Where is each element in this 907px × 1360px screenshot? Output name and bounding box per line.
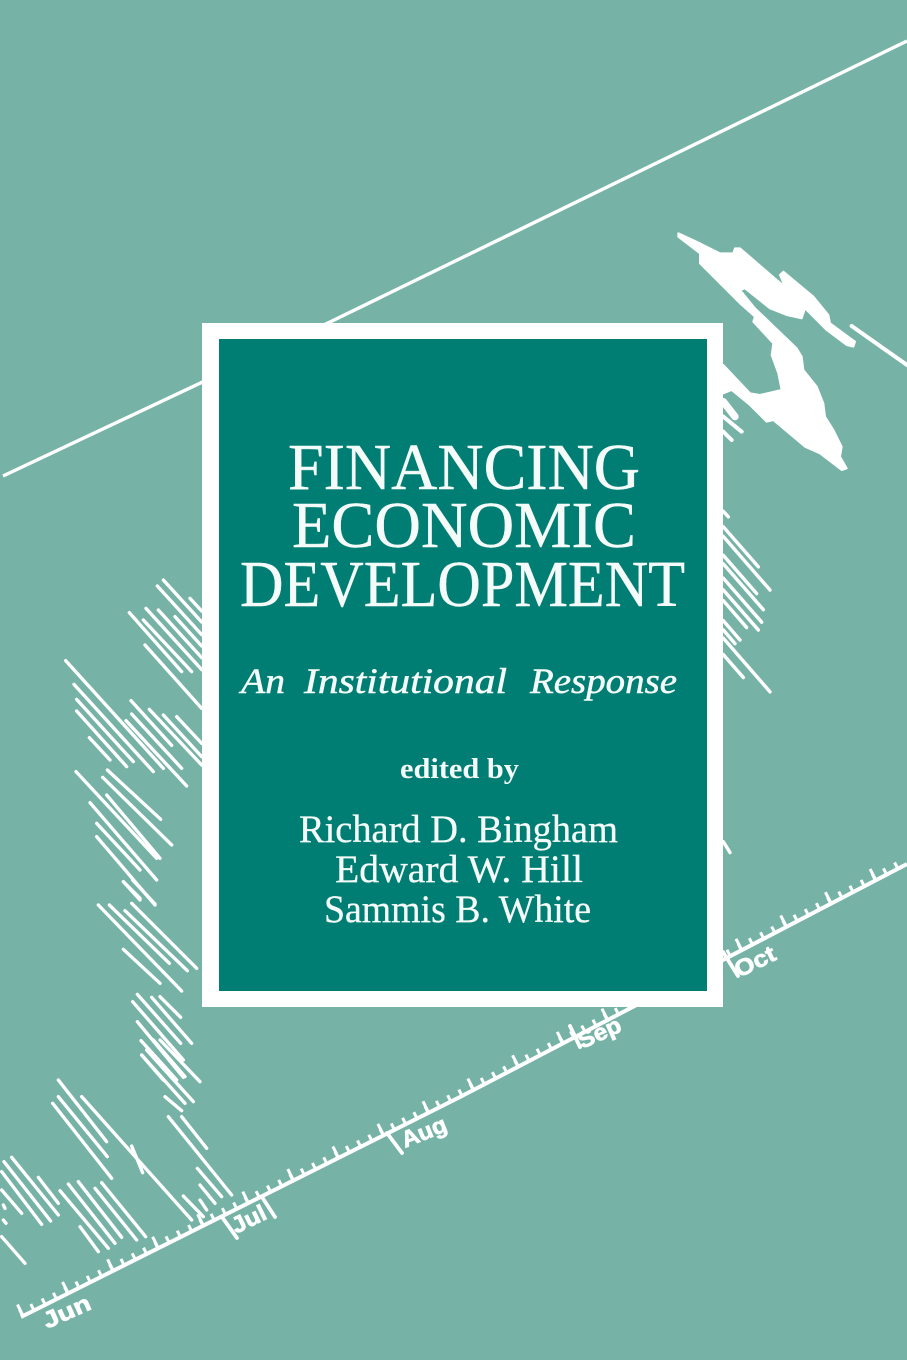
price bars: right cluster (723, 511, 770, 852)
time axis (19, 858, 907, 1334)
subtitle (239, 661, 677, 701)
price bars: upper right blob (678, 233, 907, 470)
price bars: lower left clusters (2, 1040, 232, 1263)
editors: Edward W. Hill (335, 848, 583, 891)
editors (299, 808, 618, 931)
edited by: edited by (400, 754, 519, 785)
subtitle: An (239, 661, 285, 701)
month label: Jun: Jun (38, 1289, 95, 1334)
title: ECONOMIC (292, 489, 636, 562)
editors: Sammis B. White (324, 888, 591, 931)
month label: Aug: Aug (397, 1111, 450, 1153)
trend line (3, 41, 907, 476)
title panel (219, 339, 707, 991)
month label: Sep: Sep (573, 1012, 625, 1054)
month label: Oct: Oct (730, 940, 780, 982)
subtitle: Response (529, 661, 677, 701)
month label: Jul: Jul (227, 1199, 271, 1238)
subtitle: Institutional (303, 661, 507, 701)
title (240, 431, 685, 621)
title: FINANCING (288, 431, 640, 504)
price bars: upper left clusters (66, 580, 202, 905)
editors: Richard D. Bingham (299, 808, 618, 851)
white frame (202, 323, 723, 1007)
title: DEVELOPMENT (240, 548, 685, 621)
price bars: middle left cluster (98, 880, 197, 1080)
